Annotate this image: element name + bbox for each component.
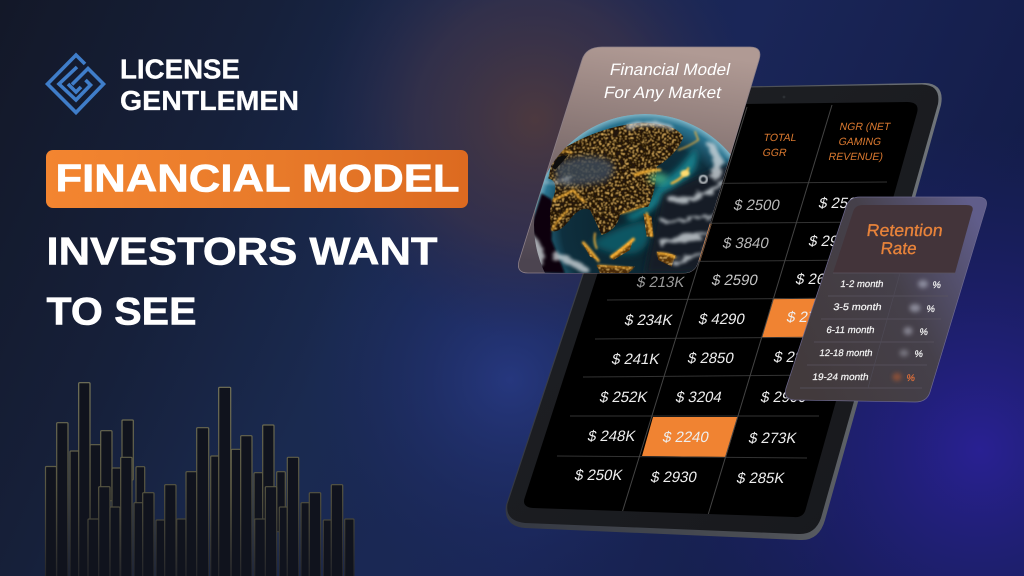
table values: $ 241K: [610, 351, 661, 368]
bright coast lights: [552, 132, 698, 268]
table values: $ 2600: [794, 271, 844, 288]
table values: $ 4290: [697, 311, 747, 328]
table values: $ 3204: [674, 389, 724, 406]
land masses with city lights: [548, 123, 683, 273]
card heading: [865, 221, 944, 258]
title text: [46, 230, 438, 334]
retention rows: %: [918, 327, 929, 338]
retention rows: 1-2 month: [839, 279, 884, 290]
card heading: Rate: [879, 239, 918, 258]
column headers: [761, 121, 892, 163]
card background: [785, 197, 987, 402]
logo wordmark: LICENSE: [120, 54, 240, 84]
title badge: FINANCIAL MODEL: [56, 158, 460, 201]
table values: $ 285K: [735, 470, 786, 487]
title text: INVESTORS WANT: [46, 230, 438, 274]
retention rows: %: [925, 304, 936, 315]
highlighted cells: [642, 224, 816, 457]
table values: $ 2700: [785, 309, 835, 326]
table: [557, 105, 892, 515]
table values: $ 213K: [635, 274, 686, 291]
table values: $ 2500: [817, 195, 867, 212]
retention rows: %: [913, 349, 924, 360]
table values: $ 2590: [710, 272, 760, 289]
column headers: REVENUE): [827, 151, 884, 163]
logo: [48, 54, 299, 116]
central asia haze: [555, 156, 614, 186]
table values: $ 3840: [721, 235, 771, 252]
table values: $ 2850: [686, 350, 736, 367]
tablet screen: [524, 102, 918, 517]
retention rows: %: [931, 280, 942, 291]
tablet body: [506, 83, 942, 540]
title text: TO SEE: [46, 290, 196, 334]
shallow sea: [625, 147, 697, 222]
table values: $ 250K: [573, 467, 624, 484]
table values: $ 2930: [649, 469, 699, 486]
table values: $ 234K: [623, 312, 674, 329]
bar chart decoration: [46, 383, 354, 576]
table values: $ 2900: [807, 233, 857, 250]
retention rows: %: [905, 373, 916, 384]
table values: $ 252K: [598, 389, 649, 406]
card background: [518, 47, 760, 273]
table values: $ 2500: [732, 197, 782, 214]
card header: [833, 205, 973, 273]
column headers: NGR (NET: [838, 121, 892, 133]
table values: $ 248K: [586, 428, 637, 445]
tablet: [506, 83, 942, 540]
retention rows: 6-11 month: [825, 325, 875, 336]
column headers: GGR: [761, 147, 788, 159]
table values: [573, 195, 867, 487]
cyclone: [700, 176, 707, 183]
table values: $ 2800: [772, 349, 822, 366]
title badge: [46, 150, 468, 208]
card heading: Retention: [865, 221, 944, 240]
glowing coast: [649, 173, 668, 184]
grid lines: [557, 105, 887, 515]
logo wordmark: [120, 54, 299, 116]
card heading: Financial Model: [608, 60, 732, 79]
row lines: [800, 273, 955, 388]
retention rows: [811, 279, 942, 384]
table values: $ 2900: [759, 389, 809, 406]
panel: retention rate card: [785, 197, 987, 402]
panel: financial model card: [518, 46, 760, 274]
card heading: For Any Market: [602, 83, 724, 102]
card heading: [602, 60, 732, 102]
dark arabian sea: [534, 192, 566, 273]
column headers: GAMING: [837, 136, 882, 148]
table values: $ 2240: [661, 429, 711, 446]
tablet camera: [783, 96, 785, 98]
globe illustration: [534, 114, 730, 273]
clouds: [528, 124, 728, 270]
icon: diamond maze logo: [48, 55, 104, 112]
logo wordmark: GENTLEMEN: [120, 85, 299, 116]
tablet bezel: [507, 84, 938, 534]
table values: $ 273K: [747, 430, 798, 447]
retention rows: 19-24 month: [811, 372, 869, 383]
blurred values: [892, 280, 928, 381]
column headers: TOTAL: [762, 132, 798, 144]
retention rows: 12-18 month: [818, 348, 873, 359]
retention rows: 3-5 month: [832, 302, 882, 313]
